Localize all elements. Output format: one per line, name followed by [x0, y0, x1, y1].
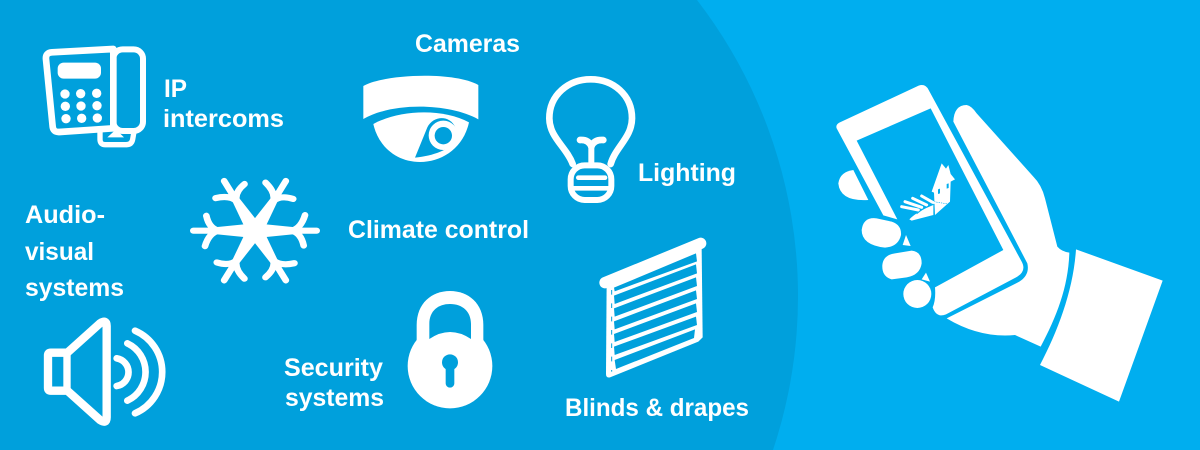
panel: darker circular background: [0, 0, 798, 450]
icon: light bulb: [549, 79, 632, 200]
shirt cuff: [1040, 249, 1163, 402]
label: IP intercoms: IP: [164, 75, 187, 103]
icon: padlock: [408, 291, 492, 408]
icon: window blinds: [605, 243, 703, 378]
fingers: [838, 170, 931, 308]
label: Cameras: Cameras: [415, 30, 520, 58]
label: Audio-visual systems: systems: [25, 274, 124, 302]
label: Climate control: Climate control: [348, 216, 529, 244]
label: Audio-visual systems: [25, 201, 124, 302]
label: Lighting: Lighting: [638, 159, 736, 187]
label: Audio-visual systems: visual: [25, 238, 94, 266]
label: Security systems: systems: [285, 384, 384, 412]
label: IP intercoms: intercoms: [163, 105, 284, 133]
icon: snowflake: [193, 173, 317, 288]
label: Security systems: [284, 354, 384, 412]
icon: hand holding smartphone: [836, 85, 1163, 402]
app logo: house on hand: [902, 163, 955, 221]
icon: dome camera: [363, 76, 478, 162]
label: Blinds & drapes: Blinds & drapes: [565, 394, 749, 422]
label: Audio-visual systems: Audio-: [25, 201, 105, 229]
hand palm: [947, 105, 1069, 347]
label: IP intercoms: [163, 75, 284, 133]
icon: speaker: [48, 322, 162, 422]
phone frame: [836, 85, 1023, 315]
label: Security systems: Security: [284, 354, 383, 382]
icon: IP intercom phone: [46, 49, 143, 145]
